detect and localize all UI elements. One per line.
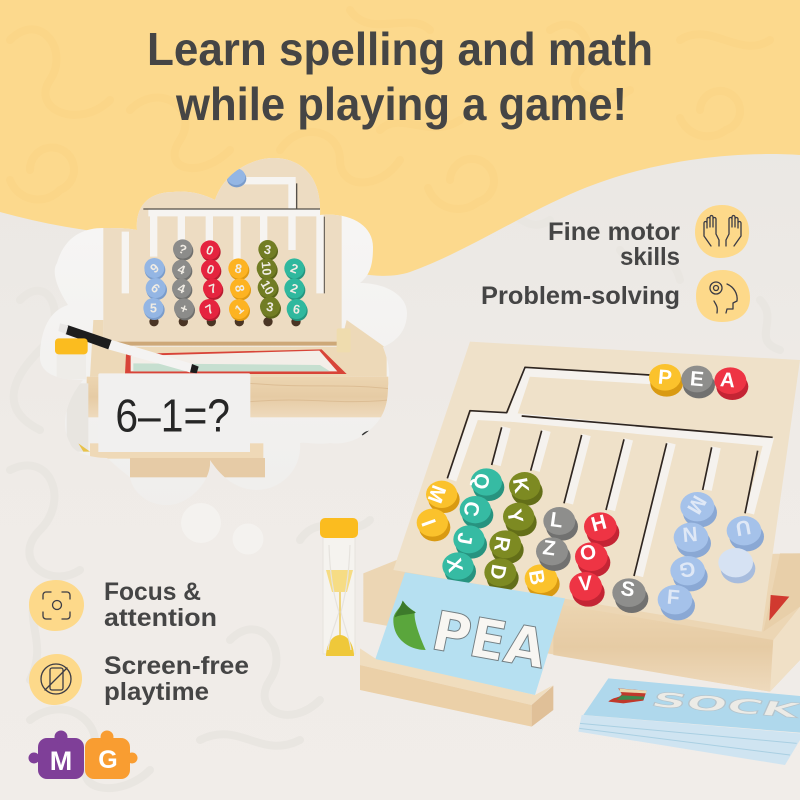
icon: sock xyxy=(608,688,647,703)
icon: head with gear xyxy=(710,282,737,313)
thought cloud with math photo xyxy=(40,158,407,478)
number beads: 3 xyxy=(265,300,275,315)
letter beads: P xyxy=(657,366,673,390)
skill: problem-solving xyxy=(481,270,750,322)
number beads: 6 xyxy=(292,302,301,317)
icon: focus frame xyxy=(43,592,70,619)
label: Screen-free xyxy=(104,652,249,680)
icon: pea pod xyxy=(393,601,426,650)
letter beads: C xyxy=(458,499,484,518)
skill: focus and attention xyxy=(29,578,217,632)
letter beads: E xyxy=(689,367,705,391)
icon blob xyxy=(696,270,750,322)
math flash card xyxy=(98,373,250,432)
label: Focus & xyxy=(104,578,201,606)
letter beads: O xyxy=(578,540,598,566)
number beads: 0 xyxy=(205,262,216,278)
label: Fine motor xyxy=(548,218,680,246)
icon blob xyxy=(29,654,82,705)
number beads: 6 xyxy=(148,281,163,296)
dark corner detail xyxy=(362,430,369,436)
letter beads: Y xyxy=(502,507,527,525)
wooden card stand xyxy=(360,648,553,727)
letter beads: F xyxy=(666,586,681,610)
number beads: 4 xyxy=(176,262,187,278)
letter beads: H xyxy=(589,511,609,537)
SOCK card deck xyxy=(578,678,800,765)
PEA flash card xyxy=(375,572,565,695)
letter beads: U xyxy=(734,515,753,540)
wooden box with worksheet xyxy=(87,320,388,417)
letter beads: Q xyxy=(468,471,494,491)
letter beads: N xyxy=(682,523,699,547)
number beads: 8 xyxy=(234,261,243,276)
hourglass in cloud xyxy=(55,338,90,452)
letter beads: V xyxy=(578,572,593,596)
skill: screen-free playtime: playtime xyxy=(104,678,209,706)
number beads: 7 xyxy=(203,302,216,317)
game board xyxy=(393,342,800,632)
letter beads: M xyxy=(423,482,450,506)
card stand xyxy=(90,440,265,477)
number beads: 4 xyxy=(176,281,187,297)
number beads: 0 xyxy=(204,243,216,258)
icon: crossed-out phone xyxy=(41,664,71,694)
math board xyxy=(103,157,342,346)
skill: fine motor skills xyxy=(548,205,749,271)
letter beads: J xyxy=(452,531,477,546)
letter beads xyxy=(416,364,764,620)
learning board product xyxy=(360,342,800,765)
title xyxy=(147,23,653,130)
number beads: 7 xyxy=(207,281,219,297)
background squiggle pattern xyxy=(10,204,780,788)
number beads: 2 xyxy=(288,281,300,297)
logo: MG puzzle pieces xyxy=(28,730,138,779)
letter beads: X xyxy=(442,556,467,574)
skill: screen-free playtime xyxy=(29,652,249,706)
math flash card: 6–1=? xyxy=(115,390,230,442)
letter beads: G xyxy=(678,557,696,581)
number beads: ? xyxy=(176,242,189,257)
label: Problem-solving xyxy=(481,282,680,310)
word on deck: SOCK xyxy=(647,689,800,723)
letter beads: L xyxy=(549,508,564,533)
number beads xyxy=(143,168,308,326)
number beads: 9 xyxy=(147,261,162,276)
letter beads: A xyxy=(719,368,736,392)
skill: focus and attention: attention xyxy=(104,604,217,632)
word on card: PEA xyxy=(427,599,552,681)
letter beads: D xyxy=(485,562,510,581)
icon blob xyxy=(29,580,84,631)
wooden box xyxy=(363,537,800,692)
letter beads: M xyxy=(682,491,711,518)
number beads: 5 xyxy=(150,302,157,316)
letter beads: B xyxy=(524,568,549,587)
title: Learn spelling and math xyxy=(147,23,653,75)
thought bubbles xyxy=(181,503,264,554)
whiteboard marker xyxy=(58,323,199,373)
number beads: + xyxy=(178,301,190,317)
letter beads: S xyxy=(619,577,637,602)
icon: two hands xyxy=(704,216,741,246)
letter beads: R xyxy=(489,534,514,553)
number beads: 2 xyxy=(288,261,300,277)
title: while playing a game! xyxy=(175,78,627,130)
letter beads: I xyxy=(416,516,440,530)
yellow wave header xyxy=(0,0,800,276)
number beads: 3 xyxy=(263,242,272,257)
number beads: 10 xyxy=(258,278,277,297)
number beads: 10 xyxy=(259,261,274,276)
header squiggle pattern xyxy=(10,10,770,209)
number beads: 8 xyxy=(232,284,247,293)
letter beads: Z xyxy=(541,536,557,561)
hourglass timer xyxy=(320,518,358,656)
letter beads: K xyxy=(508,476,533,495)
number beads: 1 xyxy=(232,302,247,317)
logo: MG puzzle pieces: M xyxy=(50,746,72,776)
skill: fine motor skills: skills xyxy=(620,243,680,271)
icon blob xyxy=(695,205,749,258)
logo: MG puzzle pieces: G xyxy=(98,746,118,774)
